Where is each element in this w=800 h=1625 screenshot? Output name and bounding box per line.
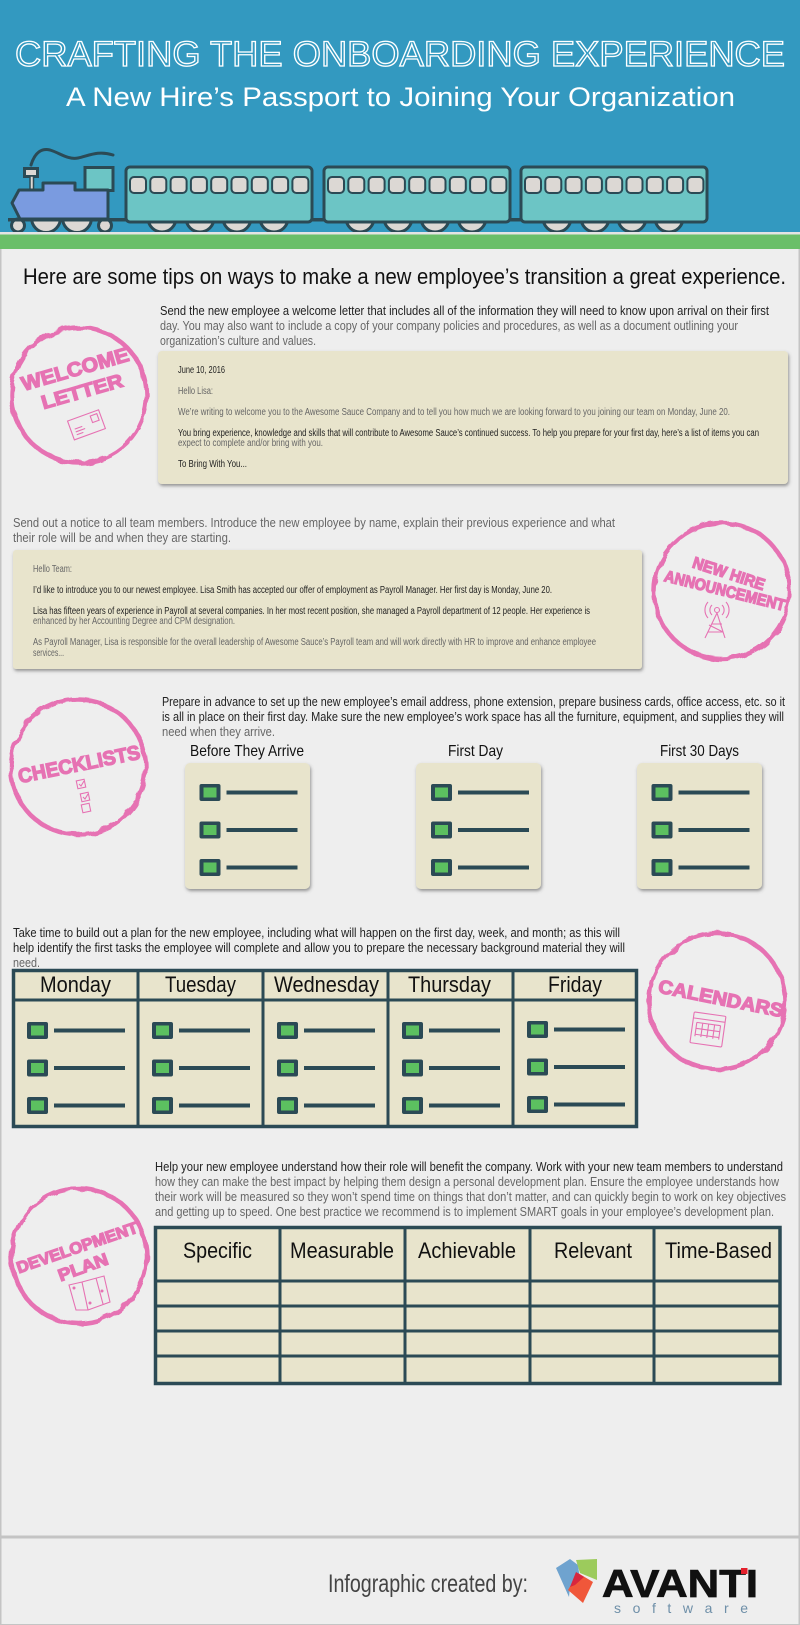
letter card: To Bring With You... [178,459,247,470]
section text [13,515,615,545]
icon: tick boxes [76,779,91,813]
calendar table: Thursday [408,972,491,997]
calendar table: Friday [548,972,602,997]
stamp: development plan: PLAN [55,1250,111,1285]
stamp: welcome letter [12,328,146,462]
section text [155,1159,786,1219]
section text: Take time to build out a plan for the new employee, including what will happen on the first day, week, and month; as this will [13,925,620,940]
panel: new hire announcement [13,515,790,669]
calendar table: Tuesday [165,972,236,997]
SMART goals table: Time-Based [665,1238,772,1263]
section text [13,925,625,970]
checklist: before they arrive: Before They Arrive [190,743,304,760]
checklist: first day [416,743,541,889]
checklist: first day: First Day [448,743,503,760]
letter card: expect to complete and/or bring with you. [178,438,323,449]
notice card: As Payroll Manager, Lisa is responsible for the overall leadership of Awesome Sauce’s Payroll team and will work directly with HR to improve and enhance employee [33,637,596,648]
section text: help identify the first tasks the employee will complete and allow you to prepare the necessary background material they will [13,940,625,955]
panel: development plan [12,1159,786,1385]
checklist: before they arrive [185,743,310,889]
stamp: welcome letter: LETTER [39,371,126,414]
section text: organization’s culture and values. [160,333,316,348]
icon: calendar [690,1012,726,1047]
stamp: welcome letter: WELCOME [19,344,132,396]
stamp: calendars [649,933,785,1069]
icon: envelope [68,410,105,440]
train car 3 [521,167,707,232]
SMART goals table: Measurable [290,1238,394,1263]
calendar table [13,970,637,1127]
letter card [158,351,788,484]
SMART goals table [154,1226,781,1385]
section text: Send out a notice to all team members. Introduce the new employee by name, explain their previous experience and what [13,515,615,530]
train car 1 [126,167,312,232]
stamp: checklists [10,700,146,834]
SMART goals table: Specific [183,1238,252,1263]
checklist: first 30 days: First 30 Days [660,743,739,760]
logo: Avanti software [556,1559,758,1616]
subtitle: A New Hire’s Passport to Joining Your Organization [66,82,735,112]
stamp: new hire announcement [654,523,790,659]
icon: antenna [705,602,729,638]
train car 2 [324,167,510,232]
stamp: calendars: CALENDARS [656,977,785,1022]
icon: map [69,1276,110,1310]
panel: welcome letter [12,303,788,484]
notice card: I’d like to introduce you to our newest employee. Lisa Smith has accepted our offer of employment as Payroll Manager. Her first day is Monday, June 20. [33,585,552,596]
section text: need. [13,955,40,970]
title: CRAFTING THE ONBOARDING EXPERIENCE [15,35,785,74]
section text [162,694,785,739]
track band [0,232,800,249]
footer [0,1536,800,1625]
notice card: Hello Team: [33,564,72,575]
logo: Avanti software: software [614,1600,748,1616]
section text: their role will be and when they are starting. [13,530,231,545]
calendar table: Wednesday [274,972,379,997]
stamp: checklists: CHECKLISTS [16,742,142,788]
notice card: enhanced by her Accounting Degree and CPM designation. [33,616,235,627]
calendar table: Monday [40,972,111,997]
stamp: new hire announcement: NEW HIRE [690,555,767,594]
footer credit text: Infographic created by: [328,1570,528,1598]
train illustration [8,150,707,232]
stamp: development plan [12,1188,146,1324]
stamp: new hire announcement: ANNOUNCEMENT [662,568,787,615]
notice card: Lisa has fifteen years of experience in Payroll at several companies. In her most recent position, she managed a Payroll department of 12 people. Her experience is [33,606,590,617]
section text [160,303,769,348]
letter card: June 10, 2016 [178,365,225,376]
icon: locomotive [8,150,126,232]
panel: checklists [10,694,785,889]
logo: Avanti software: AVANTI [602,1563,758,1606]
letter card: Hello Lisa: [178,386,213,397]
notice card: services... [33,648,64,659]
panel: calendars [13,925,785,1127]
SMART goals table: Achievable [418,1238,516,1263]
SMART goals table: Relevant [554,1238,632,1263]
checklist: first 30 days [637,743,762,889]
stamp: development plan: DEVELOPMENT [15,1220,141,1277]
section text: need when they arrive. [162,724,275,739]
header banner [0,0,800,233]
notice card [13,550,642,669]
